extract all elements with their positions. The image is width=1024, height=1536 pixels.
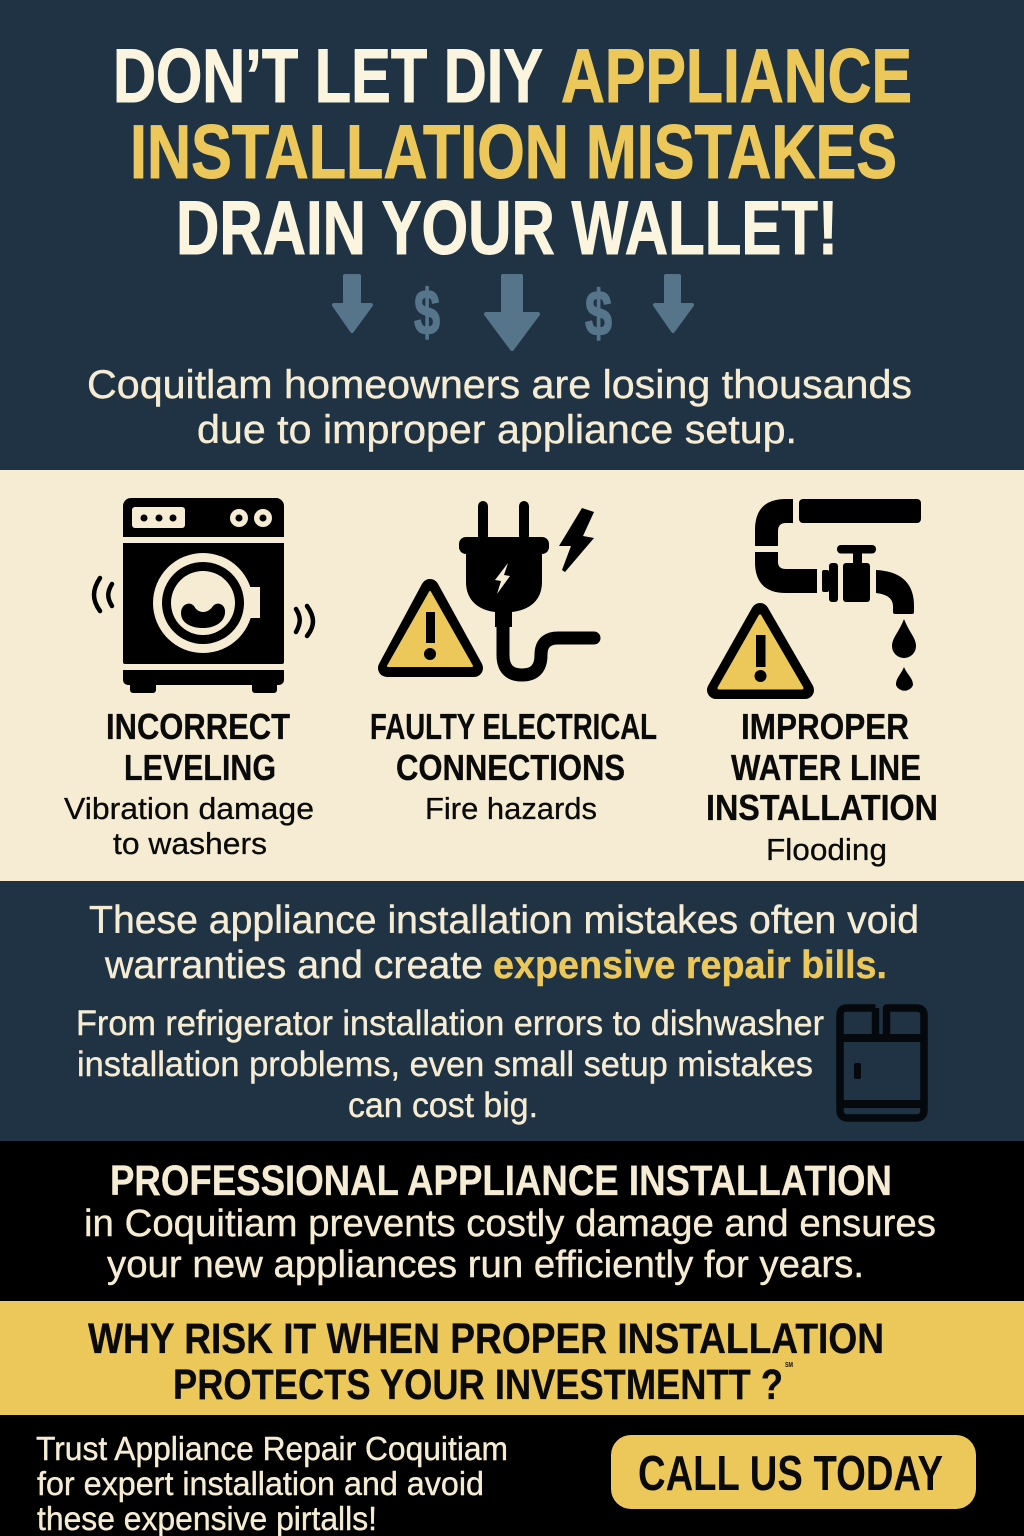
icons: falling arrows and dollars: $	[585, 277, 612, 349]
subtitle: due to improper appliance setup.	[197, 408, 797, 452]
text: trust appliance repair	[36, 1430, 508, 1536]
text: faulty electrical connections: CONNECTIONS	[396, 747, 625, 788]
panel: why risk it	[0, 1301, 1024, 1415]
heading: why risk it: WHY RISK IT WHEN PROPER INSTALLATION	[88, 1315, 884, 1363]
text: trust appliance repair: for expert installation and avoid	[37, 1465, 484, 1502]
panel: header	[0, 0, 1024, 470]
icon: refrigerator	[840, 1008, 924, 1118]
panel: mistakes	[0, 470, 1024, 881]
text: incorrect leveling	[64, 706, 314, 861]
icons: falling arrows and dollars: $	[414, 276, 440, 348]
text: warranties statement: warranties and create	[104, 944, 483, 987]
panel: professional installation	[0, 1141, 1024, 1301]
text: incorrect leveling: LEVELING	[124, 747, 276, 788]
icon: shaking washing machine	[94, 498, 313, 693]
subtitle: Coquitlam homeowners are losing thousands	[87, 363, 912, 407]
icon: electrical plug with warning	[387, 501, 594, 675]
button: call us today	[611, 1435, 976, 1509]
text: installation benefits	[84, 1203, 936, 1286]
text: improper water line installation	[706, 706, 938, 867]
text: incorrect leveling: Vibration damage	[64, 791, 314, 826]
heading: why risk it: PROTECTS YOUR INVESTMENTT ?	[173, 1361, 783, 1409]
text: faulty electrical connections: FAULTY ELECTRICAL	[370, 706, 657, 747]
text: refrigerator and dishwasher errors: From refrigerator installation errors to dishwasher	[76, 1004, 824, 1043]
title: APPLIANCE	[561, 34, 912, 119]
panel: footer	[0, 1415, 1024, 1536]
icon: leaking water pipe with warning	[716, 499, 921, 691]
button: call us today: CALL US TODAY	[638, 1447, 943, 1501]
text: improper water line installation: WATER LINE	[731, 747, 921, 788]
title: DRAIN YOUR WALLET!	[176, 186, 838, 271]
text: improper water line installation: INSTALLATION	[706, 787, 938, 828]
text: faulty electrical connections: Fire hazards	[425, 791, 597, 826]
text: refrigerator and dishwasher errors	[76, 1004, 824, 1125]
text: warranties statement: These appliance installation mistakes often void	[89, 899, 919, 942]
title	[113, 34, 912, 271]
text: faulty electrical connections	[370, 706, 657, 826]
title: DON’T LET DIY	[113, 34, 543, 119]
heading: why risk it	[88, 1315, 884, 1409]
text: improper water line installation: IMPROPER	[741, 706, 909, 747]
text: warranties statement	[89, 899, 919, 987]
text: improper water line installation: Flooding	[766, 832, 887, 867]
text: incorrect leveling: to washers	[113, 826, 267, 861]
text: trust appliance repair: Trust Appliance Repair Coquitiam	[36, 1430, 508, 1467]
text: refrigerator and dishwasher errors: installation problems, even small setup mistakes	[77, 1045, 813, 1084]
text: incorrect leveling: INCORRECT	[106, 706, 290, 747]
text: refrigerator and dishwasher errors: can cost big.	[348, 1086, 538, 1125]
text: warranties statement: expensive repair bills.	[493, 944, 887, 987]
subtitle	[87, 363, 912, 452]
text: installation benefits: your new appliances run efficiently for years.	[107, 1244, 864, 1286]
icons: falling arrows and dollars	[334, 276, 692, 349]
text: trust appliance repair: these expensive pirtalls!	[37, 1500, 377, 1536]
text: installation benefits: in Coquitiam prevents costly damage and ensures	[84, 1203, 936, 1245]
heading: professional appliance installation: PROFESSIONAL APPLIANCE INSTALLATION	[110, 1157, 892, 1205]
heading: why risk it: SM	[785, 1362, 793, 1369]
panel: warranty warning	[0, 881, 1024, 1141]
